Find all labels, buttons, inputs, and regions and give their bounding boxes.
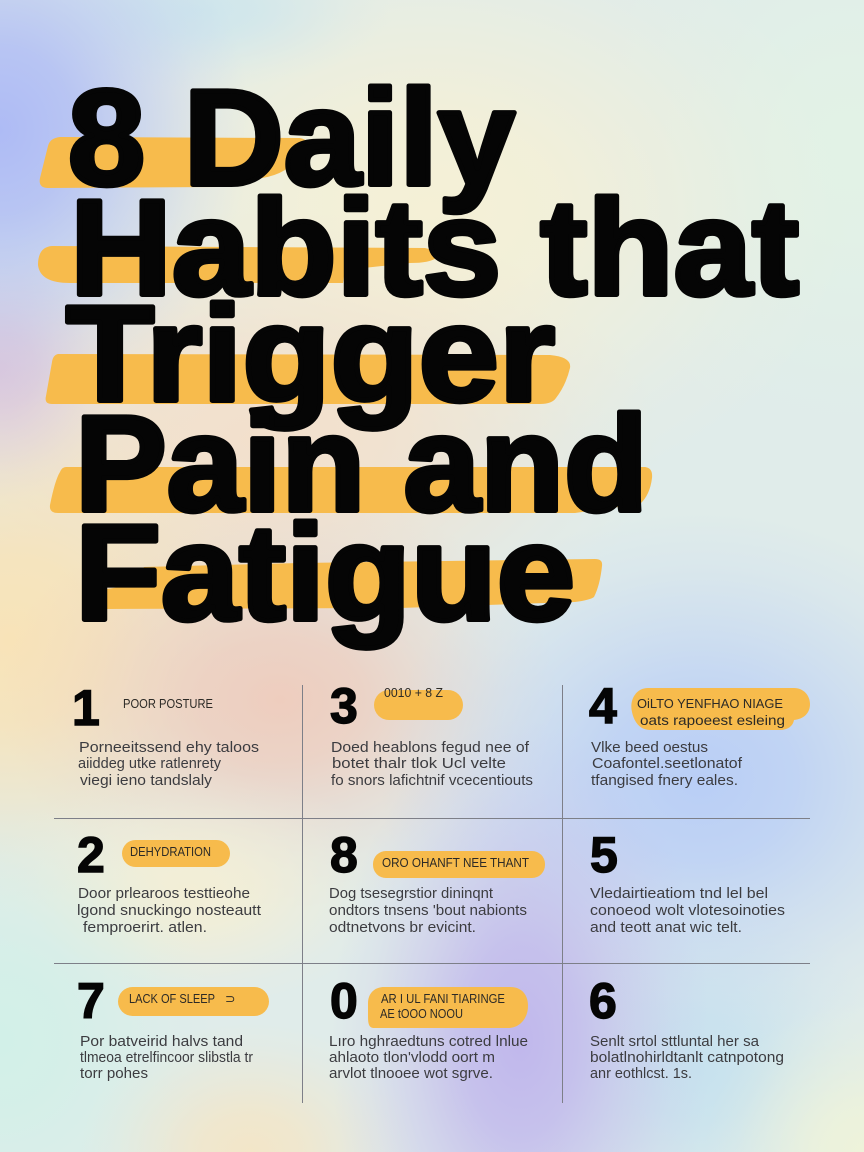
title: Habits that (70, 172, 799, 324)
habit 2: DEHYDRATION (130, 845, 211, 859)
habit 3: 0010 + 8 Z (384, 686, 443, 700)
habit 8: ORO OHANFT NEE THANT (382, 856, 529, 870)
habit 2: lgond snuckingo nosteautt (77, 903, 261, 919)
habit 8 (329, 827, 545, 936)
habit 8: ondtors tnsens 'bout nabionts (329, 903, 527, 919)
habit 8: 8 (330, 827, 358, 883)
title: 8 Daily (68, 62, 515, 214)
habit 3 (330, 678, 533, 789)
habit 4: oats rapoeest esleing (640, 713, 785, 728)
habit 5: 5 (590, 827, 618, 883)
habit 4 (589, 678, 810, 789)
habit 3: 3 (330, 678, 358, 734)
habit 8: odtnetvons br evicint. (329, 920, 476, 936)
habit 2: 2 (77, 827, 105, 883)
habit 0: arvlot tlnooee wot sgrve. (329, 1066, 493, 1082)
title: Trigger (66, 278, 555, 430)
habit 3: Doed heablons fegud nee of (331, 740, 530, 756)
habit 0: ahlaoto tlon'vlodd oort m (329, 1050, 495, 1066)
habit 7: torr pohes (80, 1066, 148, 1082)
title highlight strokes (38, 137, 652, 609)
habit 4: tfangised fnery eales. (591, 773, 738, 789)
habit 5 (590, 827, 785, 936)
habit 7: tlmeoa etrelfincoor slibstla tr (80, 1050, 253, 1066)
habit 6: 6 (589, 973, 617, 1029)
habit 1: 1 (72, 680, 100, 736)
habit 0 (329, 973, 528, 1082)
habit 0: AR I UL FANI TIARINGE (381, 992, 505, 1006)
habit 7: 7 (77, 973, 105, 1029)
habit 2: Door prlearoos testtieohe (78, 886, 250, 902)
habit 2 (77, 827, 261, 936)
habit 5: and teott anat wic telt. (590, 920, 742, 936)
habit 1: aiiddeg utke ratlenrety (78, 756, 222, 772)
habit 6 (589, 973, 784, 1082)
habit 5: Vledairtieatiom tnd lel bel (590, 886, 768, 902)
habit 6: bolatlnohirldtanlt catnpotong (590, 1050, 784, 1066)
habit 7: ⊃ (225, 992, 235, 1006)
habit 7 (77, 973, 269, 1082)
grid lines (54, 685, 810, 1103)
habit 6: Senlt srtol sttluntal her sa (590, 1034, 760, 1050)
habit 4: Coafontel.seetlonatof (592, 756, 743, 772)
habit 8: Dog tsesegrstior dininqnt (329, 886, 493, 902)
habit 3: botet thalr tlok Ucl velte (332, 756, 506, 772)
habit 0: AE tOOO NOOU (380, 1007, 463, 1021)
habit 5: conoeod wolt vlotesoinoties (590, 903, 785, 919)
habit 1 (72, 680, 259, 789)
habit 7: LACK OF SLEEP (129, 992, 215, 1006)
title: Pain and (75, 388, 648, 540)
title (66, 62, 799, 648)
habit 6: anr eothlcst. 1s. (590, 1066, 692, 1082)
habit 4: Vlke beed oestus (591, 740, 708, 756)
habit 1: POOR POSTURE (123, 697, 213, 711)
title: Fatigue (75, 496, 575, 648)
habit 0: Lıro hghraedtuns cotred lnlue (329, 1034, 528, 1050)
habit 3: fo snors lafichtnif vcecentiouts (331, 773, 533, 789)
habit 4: 4 (589, 678, 617, 734)
habit 4: OiLTO YENFHAO NIAGE (637, 697, 783, 711)
habit 7: Por batveirid halvs tand (80, 1034, 243, 1050)
habit 0: 0 (330, 973, 358, 1029)
habit 1: Porneeitssend ehy taloos (79, 740, 259, 756)
habit 1: viegi ieno tandslaly (80, 773, 213, 789)
habit 2: femproerirt. atlen. (83, 920, 207, 936)
